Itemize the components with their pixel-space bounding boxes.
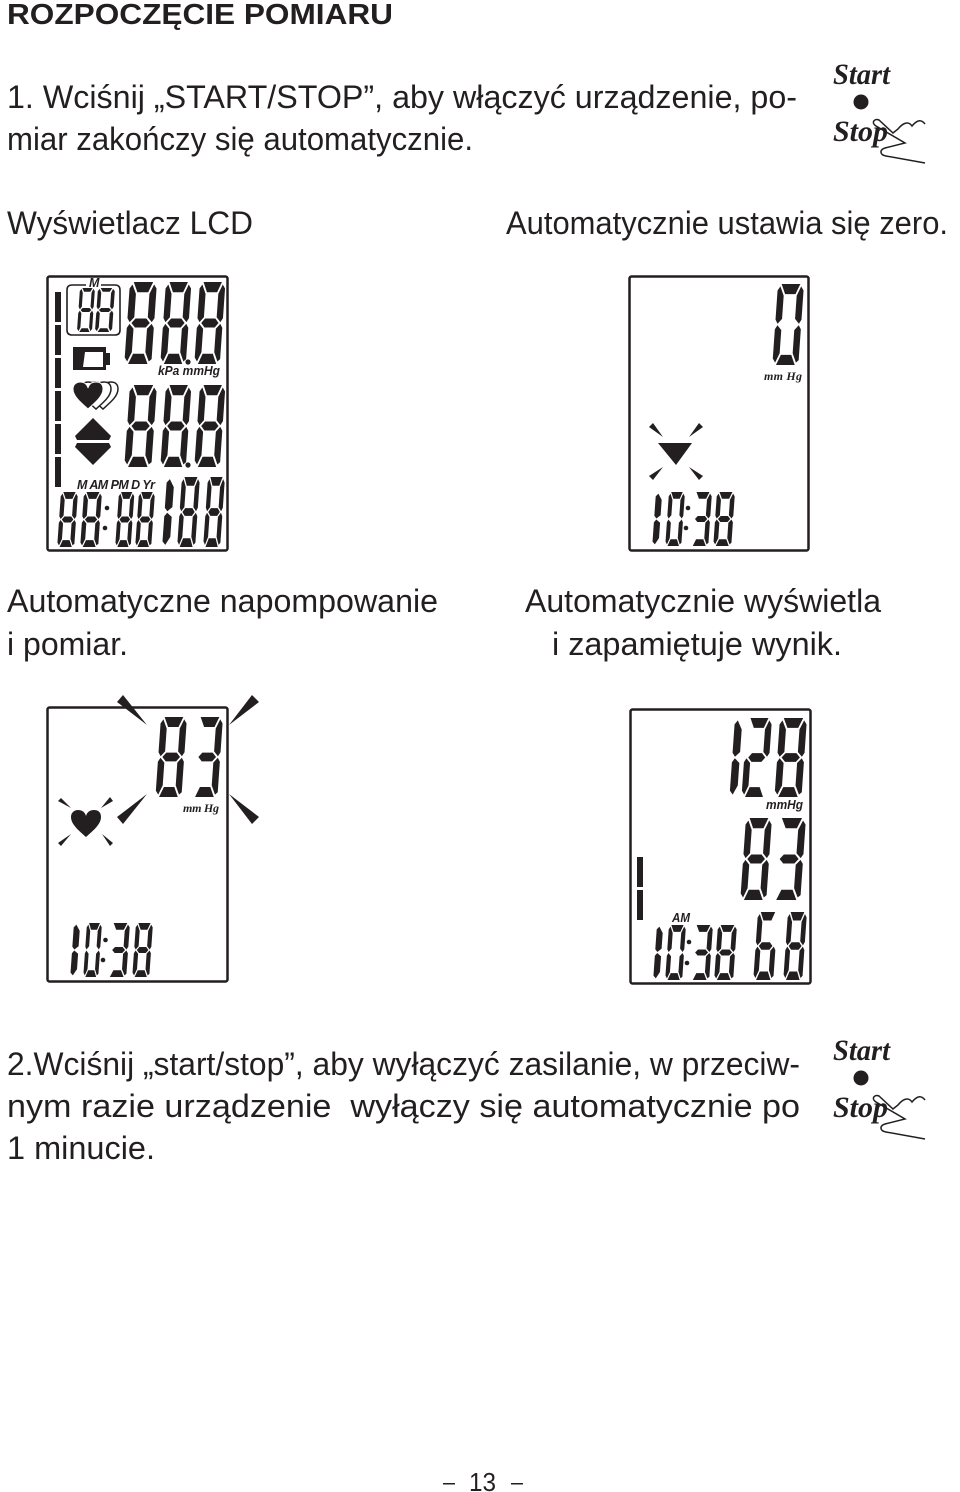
- icon: blinking triangle: [649, 423, 703, 480]
- icon: hearts: [73, 382, 118, 409]
- icon: start/stop button with hand (second): [833, 1034, 925, 1139]
- panel: result display: [630, 710, 810, 984]
- digit 0: [772, 284, 804, 365]
- step 1 text: 1. Wciśnij „START/STOP”, aby włączyć urządzenie, po-: [7, 79, 797, 115]
- date and time labels: M AM PM D Yr: [77, 478, 156, 492]
- memory box: [67, 276, 120, 335]
- caption: displays and stores result: Automatycznie wyświetla: [525, 583, 881, 619]
- icon: start/stop button with hand (second): Stop: [833, 1091, 888, 1124]
- diastolic digits 888: [124, 385, 226, 468]
- caption: inflation and measurement: i pomiar.: [7, 626, 128, 662]
- clock 10:38: [70, 923, 153, 977]
- pulse digits 68: [753, 912, 807, 980]
- systolic digits 888: [124, 282, 226, 365]
- icon: start/stop button with hand: Start: [833, 58, 892, 91]
- caption: inflation and measurement: Automatyczne napompowanie: [7, 583, 438, 619]
- unit label: mm Hg: [183, 801, 219, 815]
- digits 83: [155, 717, 223, 797]
- caption: LCD display: Wyświetlacz LCD: [7, 205, 253, 241]
- icon: inflate/deflate arrows: [75, 418, 111, 465]
- AM label: AM: [671, 911, 691, 925]
- pressure bar: [637, 857, 643, 920]
- icon: battery: [73, 347, 110, 370]
- clock digits 88:88: [57, 492, 155, 547]
- step 2 text: nym razie urządzenie wyłączy się automatycznie po: [7, 1088, 800, 1124]
- icon: blinking heart: [58, 797, 113, 846]
- memory box: M: [89, 276, 100, 290]
- clock 10:38: [652, 492, 735, 546]
- caption: auto zero: Automatycznie ustawia się zero.: [506, 205, 948, 241]
- pressure bar: [55, 292, 61, 487]
- page number: [443, 1467, 523, 1492]
- systolic digits 128: [730, 718, 807, 797]
- unit label: mm Hg: [764, 369, 802, 383]
- caption: inflation and measurement: [7, 583, 438, 662]
- step 2 text: 2.Wciśnij „start/stop”, aby wyłączyć zasilanie, w przeciw-: [7, 1046, 800, 1082]
- step 2 text: [7, 1046, 800, 1166]
- clock 10:38: [653, 925, 737, 980]
- step 1 text: miar zakończy się automatycznie.: [7, 121, 473, 157]
- panel: full LCD display: [48, 276, 228, 550]
- step 2 text: 1 minucie.: [7, 1130, 155, 1166]
- caption: displays and stores result: i zapamiętuje wynik.: [552, 626, 842, 662]
- panel: zero setting display: [630, 276, 808, 550]
- icon: start/stop button with hand (second): Start: [833, 1034, 892, 1067]
- diastolic digits 83: [740, 818, 806, 900]
- unit label: kPa mmHg: [158, 364, 220, 378]
- panel: measuring display: [48, 695, 259, 982]
- step 1 text: [7, 79, 797, 157]
- unit label: mmHg: [766, 798, 803, 812]
- icon: start/stop button with hand: [833, 58, 925, 163]
- pulse digits 188: [162, 477, 225, 547]
- icon: start/stop button with hand: Stop: [833, 115, 888, 148]
- caption: displays and stores result: [525, 583, 881, 662]
- large flash rays: [117, 695, 259, 824]
